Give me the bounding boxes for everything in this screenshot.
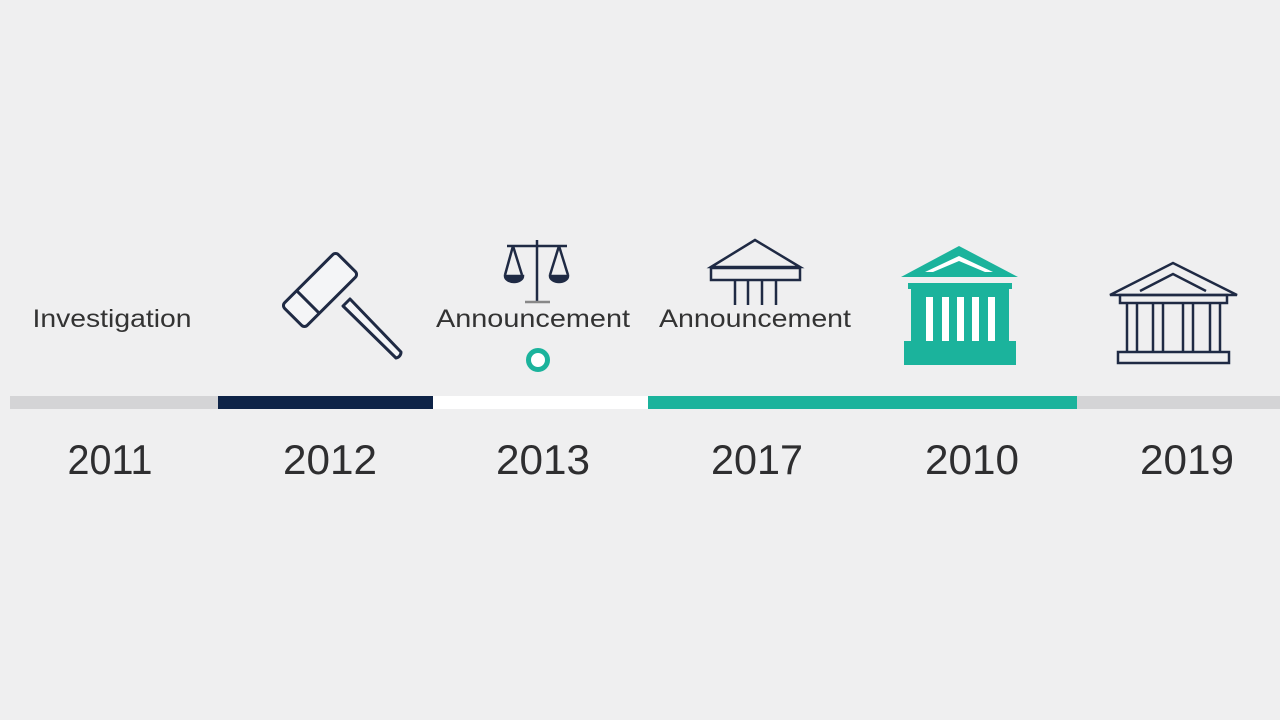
- year labels: 2019: [1140, 436, 1234, 483]
- year labels: 2011: [68, 436, 152, 483]
- label: Announcement 2013: Announcement: [436, 305, 630, 333]
- year labels: 2017: [711, 436, 803, 483]
- year labels: [68, 436, 1234, 483]
- year labels: 2010: [925, 436, 1019, 483]
- icon: building outline 2019: [1110, 263, 1237, 363]
- icon: teal ring: [528, 350, 548, 370]
- year labels: 2013: [496, 436, 590, 483]
- icon: building outline 2017: [711, 240, 800, 305]
- label: Announcement 2017: Announcement: [659, 305, 851, 333]
- icon: scales: [505, 240, 568, 302]
- label: Investigation: Investigation: [32, 305, 192, 333]
- icon: gavel: [282, 252, 401, 358]
- year labels: 2012: [283, 436, 377, 483]
- timeline bar: [10, 396, 1280, 409]
- icon: teal building: [901, 246, 1018, 365]
